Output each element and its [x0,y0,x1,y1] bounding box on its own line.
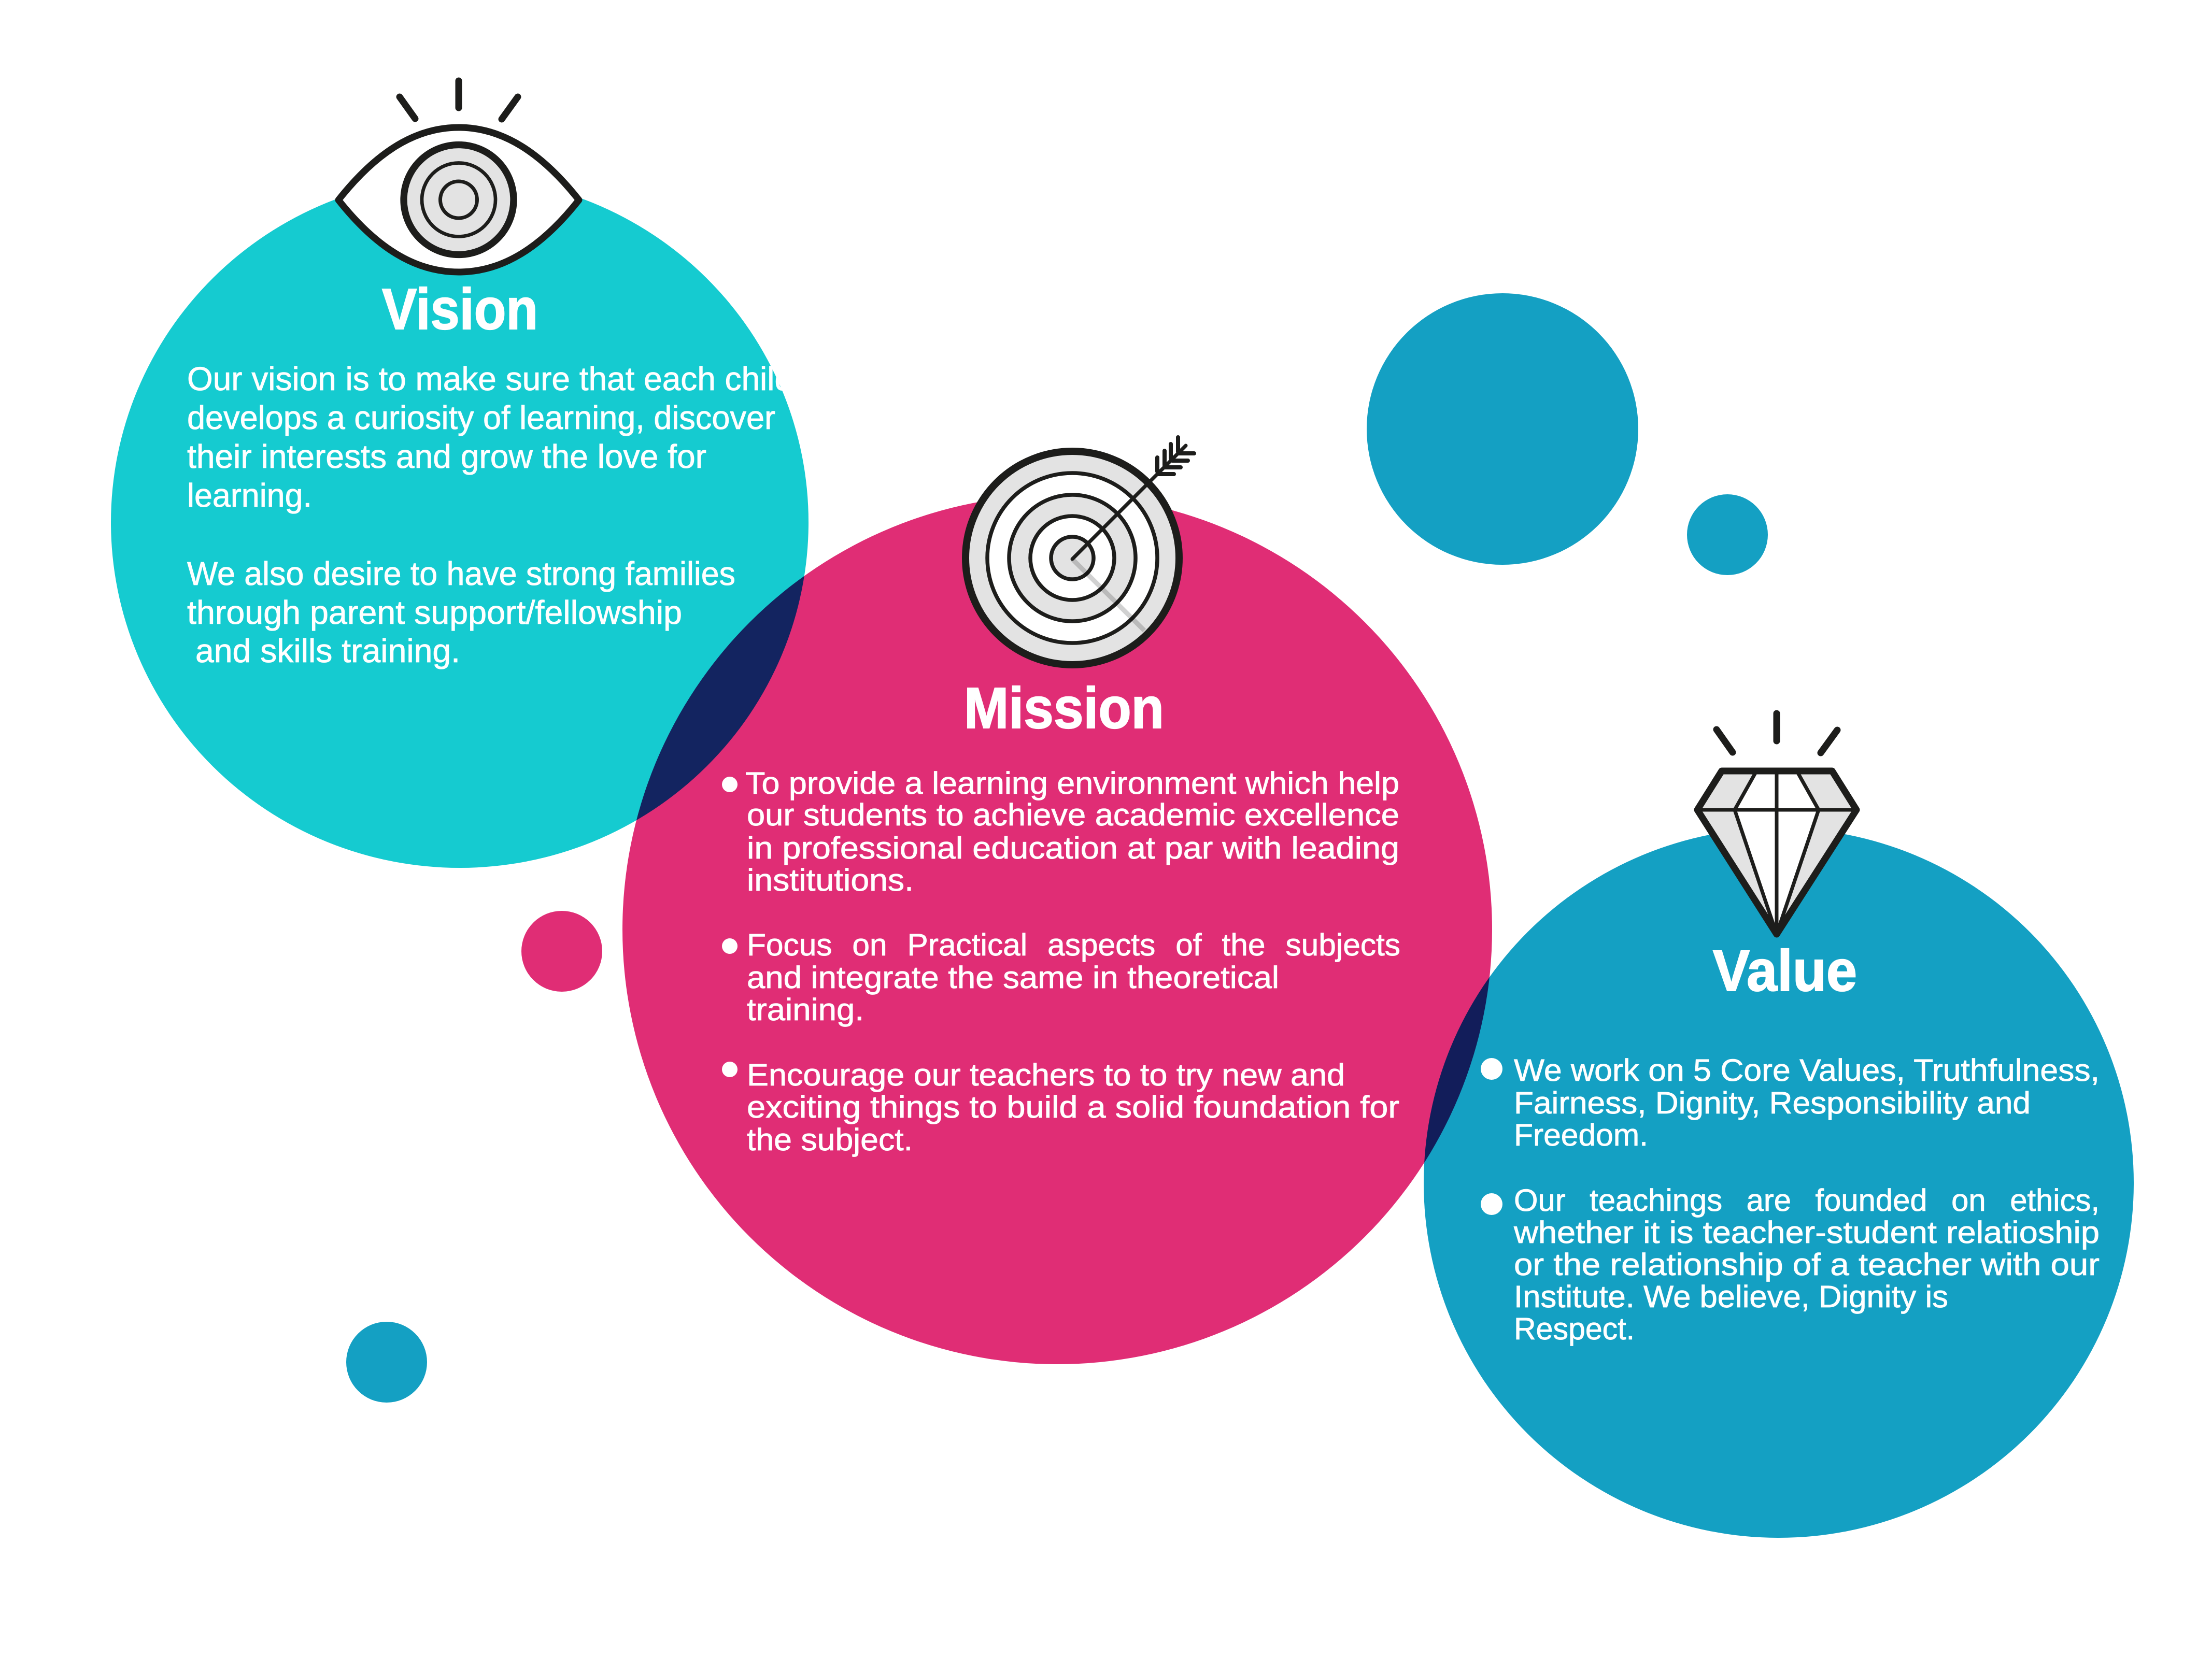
icon: diamond [1697,713,1856,934]
text block: mission bullet 2: training. [747,992,864,1027]
decorative circle: large blue [1367,293,1638,565]
text block: mission bullet 3: exciting things to build a solid foundation for [747,1090,1399,1124]
text block: vision description [187,360,793,669]
text block: value bullet 2: Respect. [1514,1311,1635,1346]
text block: value bullet 1 [1481,1053,2100,1152]
text block: vision description: develops a curiosity of learning, discover [187,399,775,436]
decorative circle: small pink [521,911,602,992]
heading: Mission: Mission [964,676,1164,740]
value circle [1424,828,2134,1538]
heading: Vision: Vision [382,277,538,341]
text block: mission bullet 1: our students to achieve academic excellence [747,797,1399,832]
decorative circle: small blue upper right [1687,494,1768,575]
text block: vision description: through parent support/fellowship [187,594,682,631]
text block: mission bullet 1: in professional education at par with leading [747,831,1399,865]
text block: vision description: We also desire to have strong families [187,555,735,592]
decorative circle: small blue lower left [346,1322,427,1403]
heading: Value: Value [1713,938,1857,1003]
icon: target with arrow [966,437,1194,665]
text block: vision description: their interests and grow the love for [187,438,706,475]
text block: value bullet 2: whether it is teacher-student relatioship [1513,1215,2100,1250]
text block: vision description: and skills training. [195,632,460,669]
panel: value [1424,713,2134,1538]
mission circle [622,495,1492,1364]
text block: vision description: learning. [187,477,312,514]
text block: mission bullet 3: Encourage our teachers to to try new and [747,1057,1345,1092]
text block: mission bullet 1: institutions. [747,863,914,897]
text block: value bullet 1: Fairness, Dignity, Responsibility and [1514,1085,2031,1120]
panel: vision [111,81,809,868]
text block: mission bullet 2: Focus on Practical aspects of the subjects [747,927,1400,962]
text block: mission bullet 1 [722,766,1399,897]
text block: value bullet 1: Freedom. [1514,1118,1648,1152]
text block: mission bullet 2 [722,927,1400,1027]
text block: value bullet 2 [1481,1183,2100,1346]
text block: mission bullet 3 [722,1057,1399,1157]
text block: mission bullet 2: and integrate the same in theoretical [747,960,1279,995]
panel: mission [622,437,1492,1364]
text block: mission bullet 3: the subject. [747,1122,913,1157]
text block: vision description: Our vision is to make sure that each child [187,360,793,397]
text block: mission bullet 1: To provide a learning environment which help [745,766,1399,801]
vision circle [111,177,809,868]
text block: value bullet 2: Institute. We believe, Dignity is [1514,1279,1948,1314]
icon: eye [338,81,579,272]
text block: value bullet 2: or the relationship of a teacher with our [1514,1247,2100,1282]
text block: value bullet 2: Our teachings are founded on ethics, [1514,1183,2100,1218]
text block: value bullet 1: We work on 5 Core Values, Truthfulness, [1514,1053,2100,1088]
